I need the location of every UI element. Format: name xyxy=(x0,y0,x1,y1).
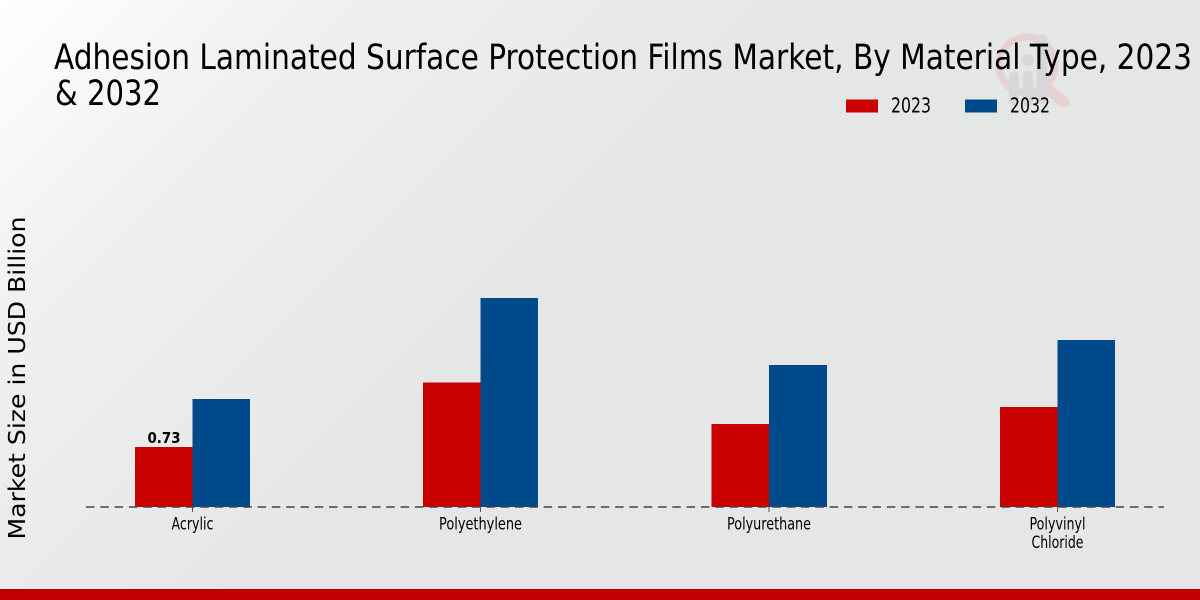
bar chart xyxy=(86,298,1164,552)
legend xyxy=(846,94,1050,118)
title: & 2032 xyxy=(55,74,161,114)
bars: Polyvinyl Chloride xyxy=(1000,340,1115,507)
bars: Polyethylene xyxy=(423,298,538,507)
footer bar xyxy=(0,589,1200,600)
icon: watermark logo xyxy=(999,37,1064,102)
x-axis labels xyxy=(172,514,1086,552)
bars: Acrylic xyxy=(135,399,250,507)
value label: 0.73: 0.73 xyxy=(148,429,180,447)
x axis baseline xyxy=(86,507,1164,512)
x-axis labels: Acrylic xyxy=(172,514,214,534)
x-axis labels: Polyethylene xyxy=(439,514,522,534)
legend item: 2023 xyxy=(846,94,931,118)
y-axis label: Market Size in USD Billion xyxy=(5,216,31,540)
legend item: 2023: 2023 xyxy=(891,94,931,118)
bars: Polyurethane xyxy=(712,365,827,507)
x-axis labels: Chloride xyxy=(1032,533,1084,552)
x-axis labels: Polyvinyl xyxy=(1030,514,1086,534)
legend item: 2032 xyxy=(965,94,1050,118)
x-axis labels: Polyurethane xyxy=(727,514,811,534)
legend item: 2032: 2032 xyxy=(1010,94,1050,118)
